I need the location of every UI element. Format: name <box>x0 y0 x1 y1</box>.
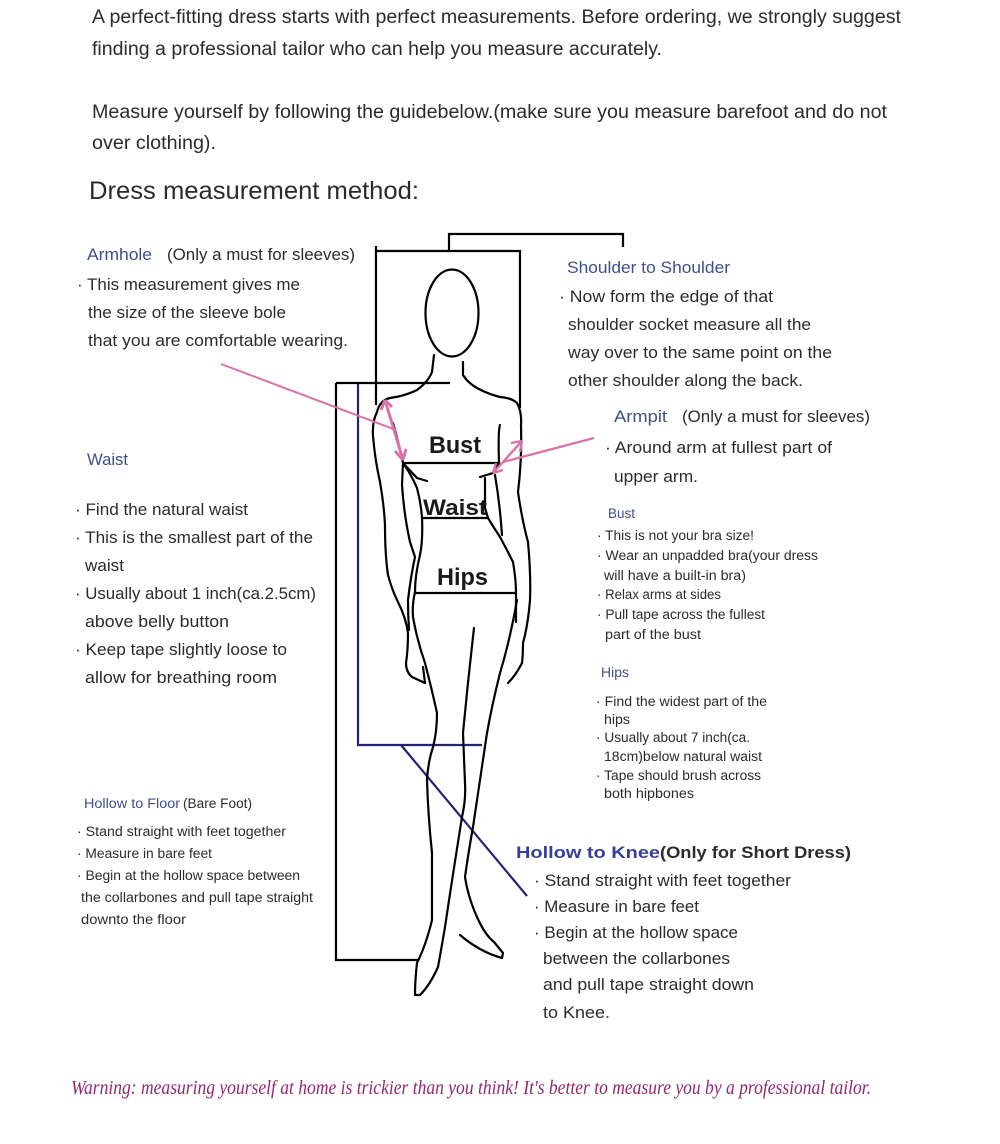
self-measure note <box>92 102 888 154</box>
armpit block: upper arm. <box>614 467 698 486</box>
armpit arrow <box>493 438 594 473</box>
hollow to floor block: Hollow to Floor <box>84 796 181 811</box>
armhole block: Armhole <box>87 245 152 264</box>
shoulder bracket lines <box>376 234 623 408</box>
armhole block: · This measurement gives me <box>77 275 300 294</box>
armhole arrow <box>221 364 406 460</box>
armhole block: that you are comfortable wearing. <box>88 331 348 350</box>
hips block: · Tape should brush across <box>596 768 761 783</box>
shoulder to shoulder block: · Now form the edge of that <box>559 287 773 306</box>
hollow to floor block: · Stand straight with feet together <box>77 824 287 839</box>
waist block: · Find the natural waist <box>75 500 248 519</box>
waist block: · Usually about 1 inch(ca.2.5cm) <box>75 584 316 603</box>
armhole block: the size of the sleeve bole <box>88 303 286 322</box>
bust block <box>597 506 818 642</box>
hollow to knee block <box>516 843 851 1022</box>
hips block: · Usually about 7 inch(ca. <box>596 730 750 745</box>
hollow to knee block: · Stand straight with feet together <box>534 871 791 890</box>
waist line <box>422 517 488 519</box>
hips label: Hips <box>437 564 488 591</box>
bust block: will have a built-in bra) <box>603 568 746 583</box>
heading: Dress measurement method: <box>89 177 419 205</box>
hips block <box>596 665 767 801</box>
waist block: above belly button <box>85 612 229 631</box>
diagram: body figure with measurement lines <box>221 234 623 995</box>
bust block: · Wear an unpadded bra(your dress <box>597 548 818 563</box>
armhole block <box>77 245 355 350</box>
hollow to knee block: Hollow to Knee <box>516 843 660 862</box>
shoulder to shoulder block: Shoulder to Shoulder <box>567 258 730 277</box>
hips block: Hips <box>601 665 629 680</box>
armpit block: (Only a must for sleeves) <box>682 407 870 426</box>
hips block: · Find the widest part of the <box>596 694 767 709</box>
hollow to floor block: · Measure in bare feet <box>77 846 212 861</box>
bust block: Bust <box>608 506 635 521</box>
bust block: part of the bust <box>605 627 701 642</box>
intro text: finding a professional tailor who can help you measure accurately. <box>92 39 662 60</box>
hollow to knee block: to Knee. <box>543 1003 610 1022</box>
waist label: Waist <box>423 495 488 520</box>
shoulder to shoulder block: way over to the same point on the <box>567 343 832 362</box>
armhole block: (Only a must for sleeves) <box>167 245 355 264</box>
armpit block <box>605 407 870 486</box>
waist block: · Keep tape slightly loose to <box>75 640 287 659</box>
waist block: · This is the smallest part of the <box>75 528 313 547</box>
hollow to knee block: · Measure in bare feet <box>534 897 699 916</box>
hollow to floor block: (Bare Foot) <box>183 796 252 811</box>
hollow to floor block: downto the floor <box>81 912 187 927</box>
hollow to floor block: · Begin at the hollow space between <box>77 868 300 883</box>
hips line <box>415 592 516 594</box>
hips block: hips <box>604 712 630 727</box>
shoulder to shoulder block <box>559 258 832 390</box>
hollow to floor block: the collarbones and pull tape straight <box>81 890 313 905</box>
hollow to floor block <box>77 796 313 927</box>
hollow to knee lines <box>358 384 527 896</box>
hollow to floor line <box>336 383 450 960</box>
intro text <box>92 7 902 60</box>
waist block: allow for breathing room <box>85 668 277 687</box>
hips block: 18cm)below natural waist <box>604 749 762 764</box>
figure outline <box>373 270 530 995</box>
armpit block: · Around arm at fullest part of <box>605 438 832 457</box>
bust line <box>403 462 498 464</box>
hollow to knee block: between the collarbones <box>543 949 730 968</box>
self-measure note: Measure yourself by following the guidebelow.(make sure you measure barefoot and do not <box>92 102 888 123</box>
warning: Warning: measuring yourself at home is trickier than you think! It's better to measure you by a professional tailor. <box>71 1077 871 1099</box>
self-measure note: over clothing). <box>92 133 216 154</box>
hollow to knee block: · Begin at the hollow space <box>534 923 738 942</box>
armpit block: Armpit <box>614 407 667 426</box>
bust block: · Pull tape across the fullest <box>597 607 765 622</box>
bust block: · This is not your bra size! <box>597 528 754 543</box>
waist block <box>75 450 316 687</box>
waist block: waist <box>84 556 124 575</box>
intro text: A perfect-fitting dress starts with perfect measurements. Before ordering, we strongly suggest <box>92 7 902 28</box>
shoulder to shoulder block: other shoulder along the back. <box>568 371 803 390</box>
shoulder to shoulder block: shoulder socket measure all the <box>568 315 811 334</box>
hollow to knee block: and pull tape straight down <box>543 975 754 994</box>
bust block: · Relax arms at sides <box>597 587 721 602</box>
waist block: Waist <box>87 450 128 469</box>
hollow to knee block: (Only for Short Dress) <box>660 843 851 862</box>
hips block: both hipbones <box>604 786 694 801</box>
bust label: Bust <box>429 432 481 459</box>
